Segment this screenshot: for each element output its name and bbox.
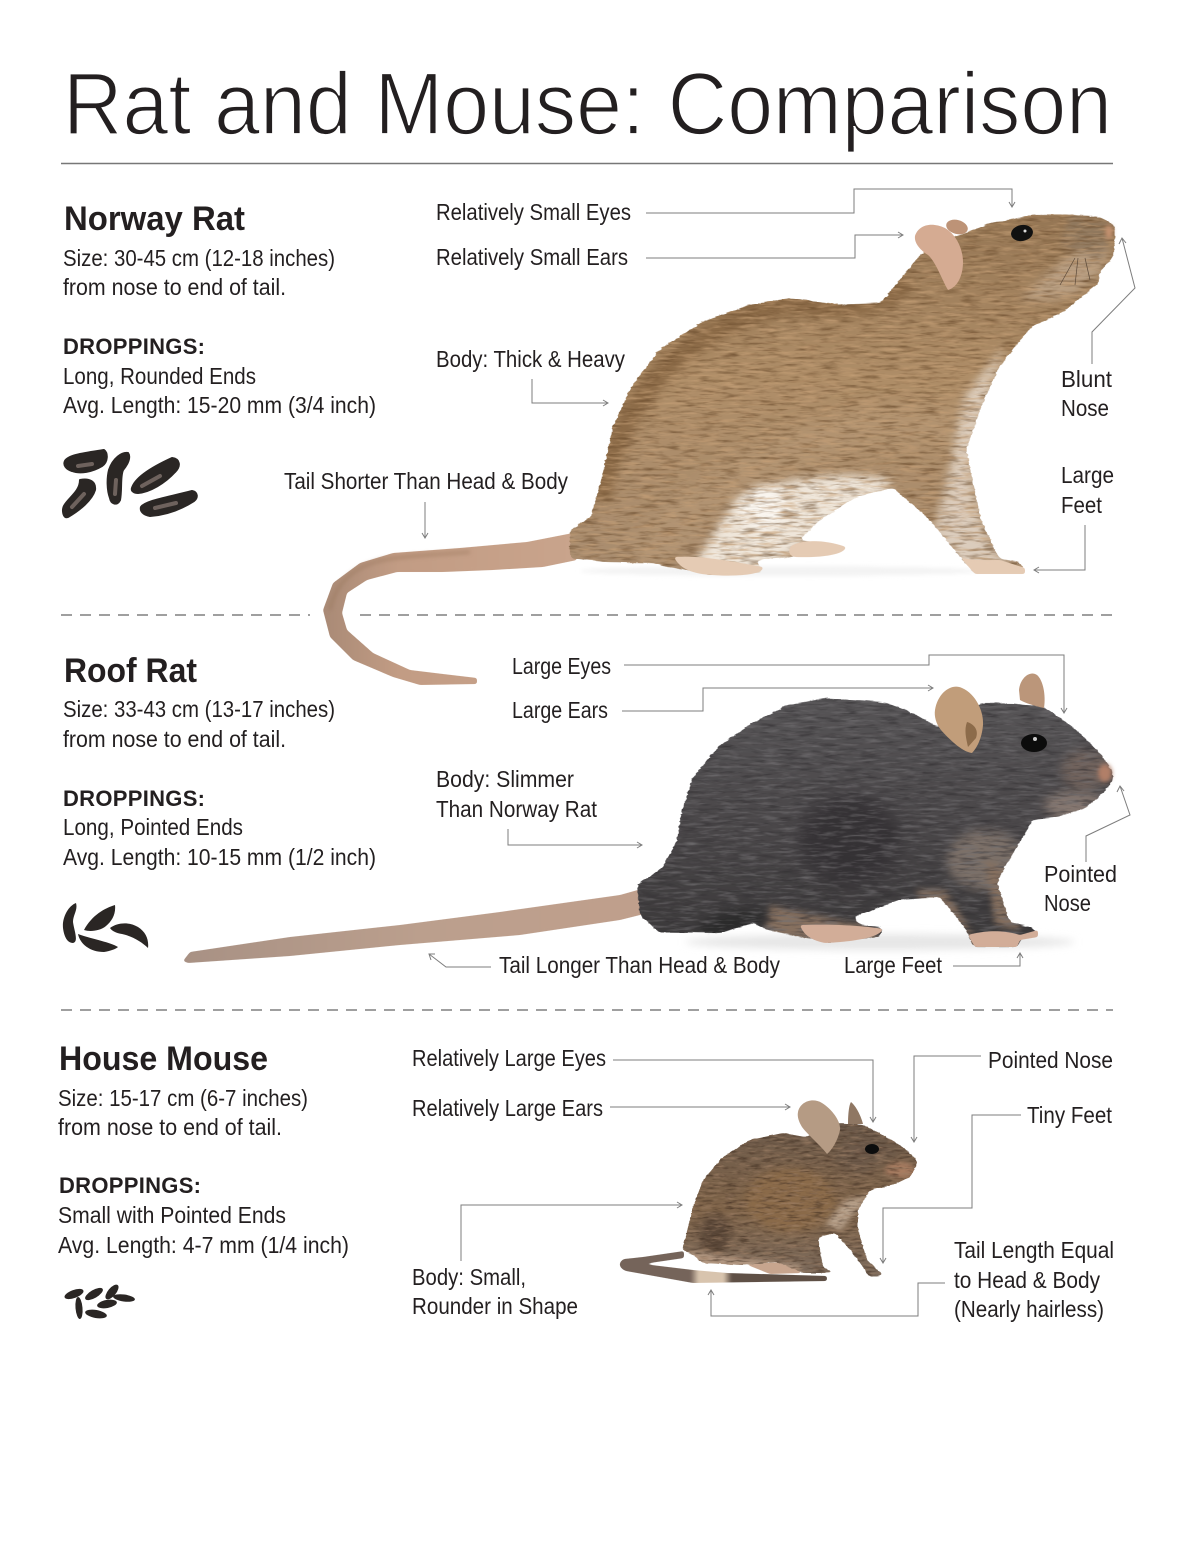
mouse small ear [848, 1102, 863, 1124]
label: Body: Thick & Heavy [436, 346, 625, 406]
panel: Roof Rat [63, 652, 1130, 978]
rat body [570, 215, 1115, 580]
label: Blunt Nose: Nose [1061, 395, 1109, 421]
rat nose [1098, 764, 1112, 782]
label: Relatively Small Ears [436, 232, 903, 270]
text: House Mouse droppings: DROPPINGS: [59, 1173, 201, 1198]
label: Body: Small, Rounder in Shape: Body: Small, [412, 1264, 526, 1290]
text: Norway Rat droppings [63, 334, 376, 418]
rat front ear [915, 225, 963, 290]
label: Tail Longer Than Head & Body: Tail Longer Than Head & Body [499, 952, 780, 978]
label: Large Eyes: Large Eyes [512, 653, 611, 679]
illustration: roof rat [183, 673, 1113, 963]
tail shading [330, 552, 470, 610]
text: Roof Rat droppings [63, 786, 376, 870]
label: Body: Slimmer Than Norway Rat: Than Norway Rat [436, 796, 598, 822]
mouse body [682, 1123, 917, 1280]
label: Tail Shorter Than Head & Body [284, 468, 568, 538]
heading: House Mouse: House Mouse [59, 1040, 268, 1078]
label: Pointed Nose: Nose [1044, 890, 1091, 916]
rat shadow [685, 934, 1075, 950]
text: Norway Rat droppings: Avg. Length: 15-20 mm (3/4 inch) [63, 392, 376, 418]
text: House Mouse droppings: Small with Pointed Ends [58, 1202, 286, 1228]
label: Tiny Feet [880, 1102, 1113, 1263]
label: Tail Shorter Than Head & Body: Tail Shorter Than Head & Body [284, 468, 568, 494]
panel: House Mouse [58, 1040, 1114, 1322]
rat tail [323, 533, 577, 685]
rat far ear [1019, 673, 1045, 708]
label: Large Feet: Feet [1061, 492, 1103, 518]
text: House Mouse size: Size: 15-17 cm (6-7 inches) [58, 1085, 308, 1111]
text: House Mouse size [58, 1085, 308, 1140]
label: Relatively Large Ears [412, 1095, 790, 1121]
heading: Roof Rat: Roof Rat [64, 652, 197, 690]
label: Relatively Small Eyes: Relatively Small Eyes [436, 199, 631, 225]
label: Relatively Small Ears: Relatively Small Ears [436, 244, 628, 270]
label: Pointed Nose: Pointed [1044, 861, 1117, 887]
label: Tail Length Equal to Head & Body: Tail Length Equal [954, 1237, 1114, 1263]
text: Roof Rat droppings: Avg. Length: 10-15 mm (1/2 inch) [63, 844, 376, 870]
text: House Mouse droppings [58, 1173, 349, 1258]
mouse eye [865, 1144, 879, 1154]
mouse big ear [798, 1100, 840, 1154]
illustration: Norway rat [323, 215, 1115, 685]
text: Roof Rat droppings: DROPPINGS: [63, 786, 205, 811]
text: Roof Rat size [63, 696, 335, 752]
icon: Roof Rat droppings [63, 903, 148, 952]
rat nose [1105, 225, 1113, 239]
label: Pointed Nose [911, 1047, 1113, 1142]
text: Roof Rat droppings: Long, Pointed Ends [63, 814, 243, 840]
rat back ear [945, 217, 969, 237]
label: Relatively Large Eyes: Relatively Large Eyes [412, 1045, 606, 1071]
heading: Norway Rat: Norway Rat [64, 200, 245, 238]
label: Tail Length Equal to Head & Body: (Nearly hairless) [954, 1296, 1104, 1322]
label: Pointed Nose [1044, 786, 1130, 916]
label: Tail Length Equal to Head & Body: to Head & Body [954, 1267, 1100, 1293]
rat eye [1010, 223, 1034, 243]
label: Tail Length Equal to Head & Body [708, 1237, 1114, 1322]
label: Pointed Nose: Pointed Nose [988, 1047, 1113, 1073]
mouse feet [745, 1262, 803, 1274]
icon: Norway Rat droppings [63, 450, 197, 517]
label: Large Feet: Large Feet [844, 952, 943, 978]
text: Norway Rat size [63, 245, 335, 300]
rat eye [1021, 734, 1047, 752]
label: Body: Slimmer Than Norway Rat: Body: Slimmer [436, 766, 574, 792]
text: Roof Rat size: Size: 33-43 cm (13-17 inches) [63, 696, 335, 722]
rat shadow [580, 566, 980, 576]
icon: House Mouse droppings [63, 1283, 135, 1320]
label: Large Ears [512, 685, 933, 723]
label: Large Ears: Large Ears [512, 697, 608, 723]
title: Rat and Mouse: Comparison [63, 54, 1112, 153]
label: Relatively Small Eyes [436, 189, 1015, 225]
text: House Mouse size: from nose to end of tail. [58, 1114, 282, 1140]
rat hind feet [674, 541, 1025, 576]
text: Norway Rat droppings: Long, Rounded Ends [63, 363, 256, 389]
mouse tail [620, 1251, 827, 1283]
rat ear shadow [965, 722, 977, 747]
label: Blunt Nose: Blunt [1061, 366, 1113, 392]
label: Large Feet [1034, 462, 1114, 573]
text: House Mouse droppings: Avg. Length: 4-7 mm (1/4 inch) [58, 1232, 349, 1258]
rat whiskers [1060, 258, 1090, 285]
label: Tiny Feet: Tiny Feet [1027, 1102, 1113, 1128]
rat tail [183, 888, 660, 963]
rat feet [800, 925, 1038, 947]
text: Norway Rat size: from nose to end of tail. [63, 274, 286, 300]
illustration: house mouse [620, 1100, 917, 1283]
label: Body: Small, Rounder in Shape [412, 1202, 682, 1319]
label: Large Feet: Large [1061, 462, 1114, 488]
label: Relatively Large Ears: Relatively Large Ears [412, 1095, 603, 1121]
label: Body: Small, Rounder in Shape: Rounder in Shape [412, 1293, 578, 1319]
text: Norway Rat size: Size: 30-45 cm (12-18 inches) [63, 245, 335, 271]
label: Relatively Large Eyes [412, 1045, 876, 1122]
label: Blunt Nose [1061, 238, 1135, 421]
text: Norway Rat droppings: DROPPINGS: [63, 334, 205, 359]
label: Large Eyes [512, 653, 1067, 713]
panel: Norway Rat [63, 189, 1135, 685]
text: Roof Rat size: from nose to end of tail. [63, 726, 286, 752]
label: Body: Slimmer Than Norway Rat [436, 766, 642, 848]
label: Large Feet [844, 952, 1023, 978]
label: Body: Thick & Heavy: Body: Thick & Heavy [436, 346, 625, 372]
rat large ear [935, 687, 983, 753]
rat body [637, 698, 1113, 950]
